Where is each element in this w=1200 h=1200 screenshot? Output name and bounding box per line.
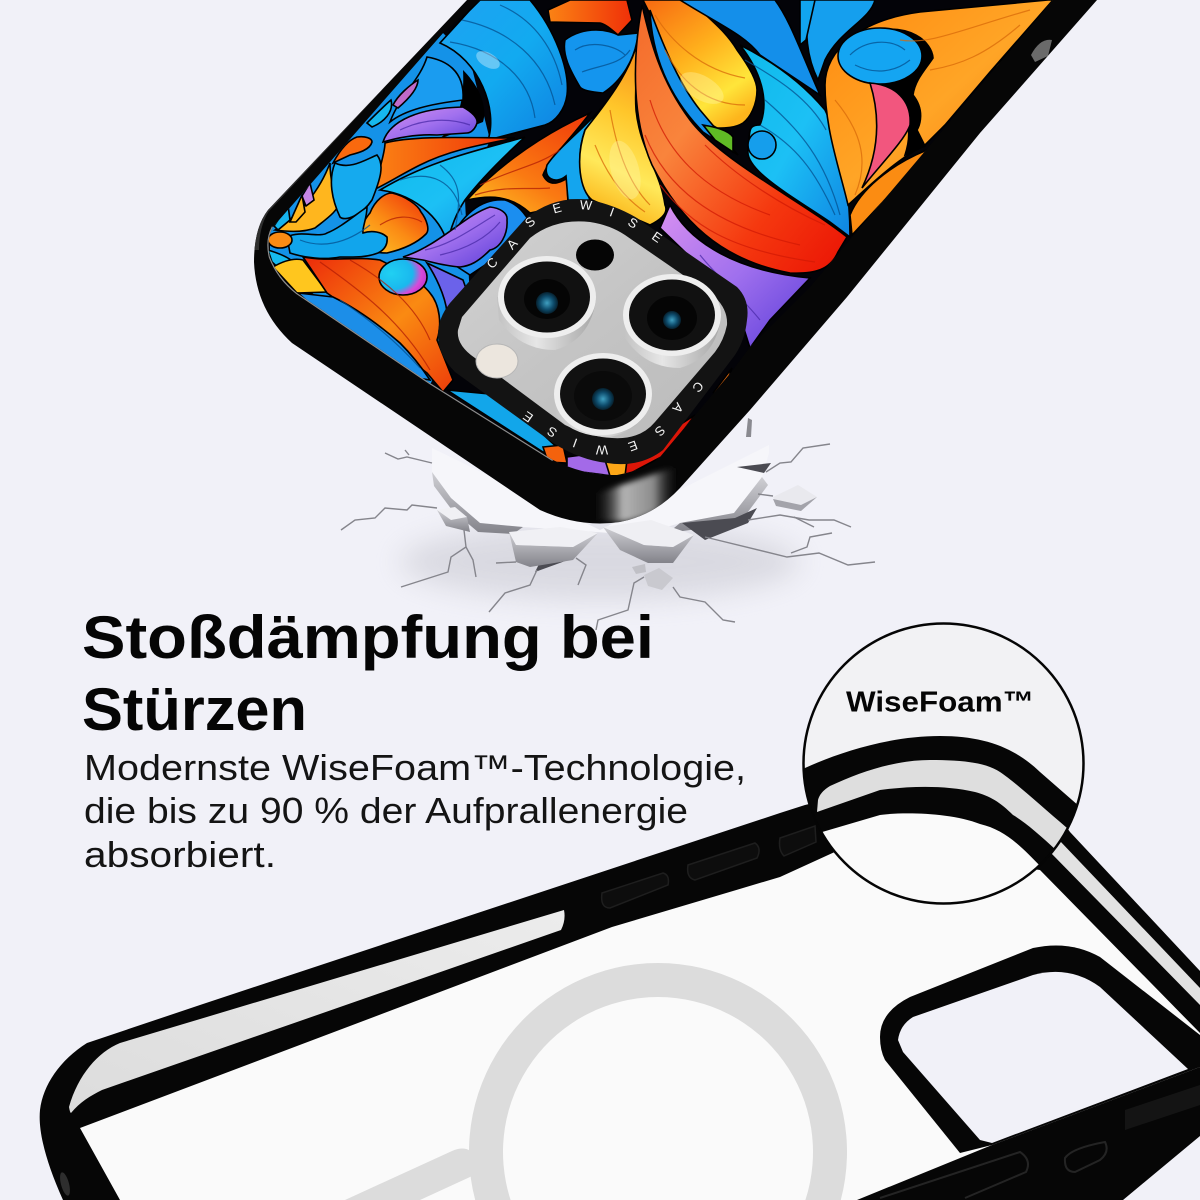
brand ring lettering: A	[504, 235, 521, 252]
leaf: big red orange	[635, 5, 847, 273]
blob: cyan left	[331, 155, 381, 219]
lens: top left	[497, 256, 596, 350]
leaf: lower orange right	[850, 150, 927, 235]
surround ring	[438, 199, 748, 464]
sliver: yellow right	[995, 40, 1022, 68]
body text	[84, 747, 746, 875]
body text: die bis zu 90 % der Aufprallenergie	[84, 790, 688, 831]
WiseFoam label: WiseFoam™	[846, 686, 1034, 718]
blob: cyan lower left	[268, 250, 291, 264]
rim screen edge	[269, 227, 553, 460]
base colour left half	[270, 33, 490, 385]
brand ring lettering: I	[571, 435, 579, 451]
brand ring lettering: W	[595, 442, 608, 458]
slab walls	[432, 472, 768, 534]
lower buttons	[880, 1142, 1107, 1198]
leaf: blue behind purple flower	[457, 200, 526, 276]
swirl shadow: black	[870, 29, 933, 155]
row: blue blobs	[287, 207, 387, 258]
leaf: cyan right	[740, 45, 850, 237]
rock chunk: centre right	[603, 520, 694, 563]
black crescent	[442, 70, 484, 137]
leaf: orange centre	[467, 113, 590, 213]
leaf: blue lower	[298, 293, 430, 380]
sliver: purple	[302, 183, 314, 206]
camera cutout rim	[880, 945, 1200, 1153]
leaf: top blue	[680, 0, 820, 95]
camera surround	[438, 197, 748, 464]
magnified clear interior	[800, 810, 1045, 905]
lower right glare	[1125, 1085, 1200, 1130]
brand ring lettering: A	[669, 400, 687, 416]
brand ring lettering: E	[649, 228, 665, 246]
leaf: pink	[862, 83, 910, 188]
corner gloss	[598, 468, 674, 523]
brand ring lettering: S	[544, 423, 560, 441]
leaf: red orange lower	[303, 257, 453, 392]
leaf: pink sliver	[393, 80, 418, 108]
brand ring lettering: S	[625, 214, 641, 232]
phone case with colourful pattern	[250, 0, 1097, 524]
brand ring lettering: E	[626, 437, 640, 455]
flash	[476, 344, 518, 378]
leaf: small cyan	[367, 100, 392, 127]
side button top right	[1031, 40, 1052, 62]
port slot	[58, 1171, 72, 1197]
brand ring lettering: I	[608, 204, 616, 220]
magnetic alignment bar	[345, 1149, 478, 1200]
raised slab plates	[432, 445, 769, 535]
band: orange	[373, 137, 515, 190]
camera plate	[458, 221, 727, 438]
strip: blue between leaves	[650, 10, 738, 155]
artwork pattern	[250, 0, 1060, 480]
lens: right	[623, 274, 721, 368]
leaf: cyan centre left	[378, 138, 522, 235]
rock chunk: right	[773, 485, 817, 511]
leaf: orange tip	[333, 137, 372, 163]
magnetic ring	[469, 963, 847, 1200]
heart: orange right	[825, 0, 1053, 205]
magnified foam gap	[817, 760, 1067, 851]
body text: absorbiert.	[84, 834, 276, 875]
leaf: purple flower	[403, 207, 507, 267]
leaf: far top blue	[807, 0, 875, 80]
leaf: purple right of camera	[660, 205, 810, 348]
foam gap left	[69, 910, 565, 1113]
brand ring lettering: E	[520, 408, 536, 426]
leaf: purple	[383, 107, 477, 142]
leaf: green	[703, 125, 733, 152]
rock chunk: left	[437, 507, 470, 532]
foam gap right	[1050, 841, 1200, 1005]
case top rim highlight	[254, 49, 420, 250]
magnifier callout	[795, 624, 1095, 905]
brand ring lettering: E	[551, 200, 563, 216]
leaf: top orange yellow	[643, 0, 757, 128]
strip: blue under camera	[450, 391, 554, 452]
drop: orange small	[268, 232, 292, 248]
lens: bottom	[554, 353, 652, 437]
side buttons	[602, 826, 816, 908]
body text: Modernste WiseFoam™-Technologie,	[84, 747, 746, 788]
leaf: purple lower	[427, 263, 470, 312]
case body	[254, 0, 1097, 524]
strip: red under camera	[625, 415, 695, 476]
brand ring lettering: W	[579, 197, 593, 213]
heading	[82, 604, 654, 743]
clear interior	[80, 845, 1200, 1200]
strip: orange under camera	[543, 445, 567, 463]
sliver: yellow	[290, 195, 305, 222]
rock chunk: lower small	[632, 564, 673, 590]
swirl: blue top	[564, 30, 638, 93]
dark fissures	[535, 418, 771, 572]
soft impact shadow	[400, 524, 800, 600]
brand ring lettering: S	[522, 213, 538, 230]
pattern veins	[300, 5, 1030, 370]
leaf: yellow far left	[275, 163, 340, 231]
swirl: blue right	[838, 28, 922, 84]
magnified outer black rim	[795, 736, 1095, 900]
strip: purple under camera	[567, 452, 613, 476]
brand ring lettering: C	[689, 379, 707, 395]
camera cutout opening	[898, 972, 1188, 1143]
leaf: yellow centre	[578, 52, 666, 224]
brand ring lettering: C	[483, 254, 501, 272]
rock chunk: centre left	[509, 527, 598, 567]
brand ring lettering	[483, 197, 707, 458]
brand ring lettering: S	[651, 423, 668, 440]
streak: blue teardrop	[546, 119, 592, 200]
strip: yellow under camera	[605, 460, 630, 476]
leaf: blue sliver	[800, 0, 815, 45]
cracked surface under impact	[341, 418, 875, 630]
magnified rim	[795, 736, 1095, 905]
highlights on leaves	[473, 47, 729, 203]
strip: orange right of camera	[713, 368, 732, 393]
leaf: yellow lower left	[273, 259, 327, 293]
leaf: blue beside purple	[390, 57, 463, 122]
flower: orange	[364, 192, 429, 254]
microphone hole	[576, 240, 614, 270]
ball: cyan and pink	[379, 259, 427, 295]
circle: cyan curl	[748, 131, 776, 159]
heading: Stürzen	[82, 676, 307, 743]
leaf: large blue upper left	[440, 0, 567, 140]
black rim	[40, 770, 1200, 1200]
sliver: cyan	[274, 205, 290, 230]
heading: Stoßdämpfung bei	[82, 604, 654, 671]
crack lines	[341, 444, 875, 630]
magnifier outline	[804, 624, 1084, 904]
leaf: flame top	[548, 0, 632, 35]
open clear case	[40, 770, 1200, 1200]
magnifier background	[804, 624, 1084, 904]
